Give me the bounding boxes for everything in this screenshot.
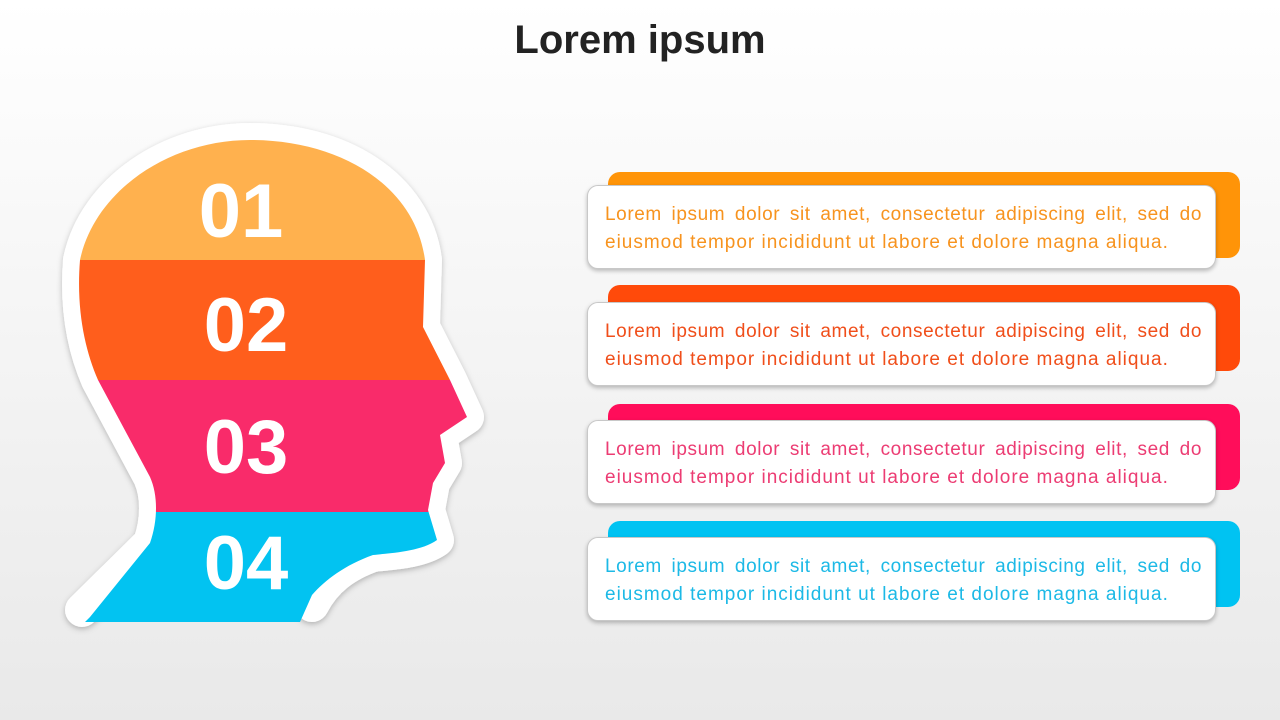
head white outline [79, 140, 467, 610]
head graphic [59, 122, 487, 632]
card 1: eiusmod tempor incididunt ut labore et dolore magna aliqua. [605, 232, 1169, 253]
card 1: Lorem ipsum dolor sit amet, consectetur adipiscing elit, sed do [605, 204, 1202, 225]
band numbers: 04 [204, 521, 288, 606]
band numbers: 01 [199, 169, 283, 254]
title: Lorem ipsum [514, 18, 766, 62]
band numbers: 02 [204, 283, 288, 368]
card 2 [584, 285, 1240, 390]
card 4: eiusmod tempor incididunt ut labore et dolore magna aliqua. [605, 584, 1169, 605]
card 3: eiusmod tempor incididunt ut labore et dolore magna aliqua. [605, 467, 1169, 488]
band numbers: 03 [204, 405, 288, 490]
band numbers [199, 169, 288, 606]
card 2: Lorem ipsum dolor sit amet, consectetur adipiscing elit, sed do [605, 321, 1202, 342]
head color bands [79, 140, 467, 622]
card 3 [584, 404, 1240, 508]
card 4 [584, 521, 1240, 626]
card 3: Lorem ipsum dolor sit amet, consectetur adipiscing elit, sed do [605, 439, 1202, 460]
card 4: Lorem ipsum dolor sit amet, consectetur adipiscing elit, sed do [605, 556, 1202, 577]
card 1 [584, 172, 1240, 274]
card 2: eiusmod tempor incididunt ut labore et dolore magna aliqua. [605, 349, 1169, 370]
